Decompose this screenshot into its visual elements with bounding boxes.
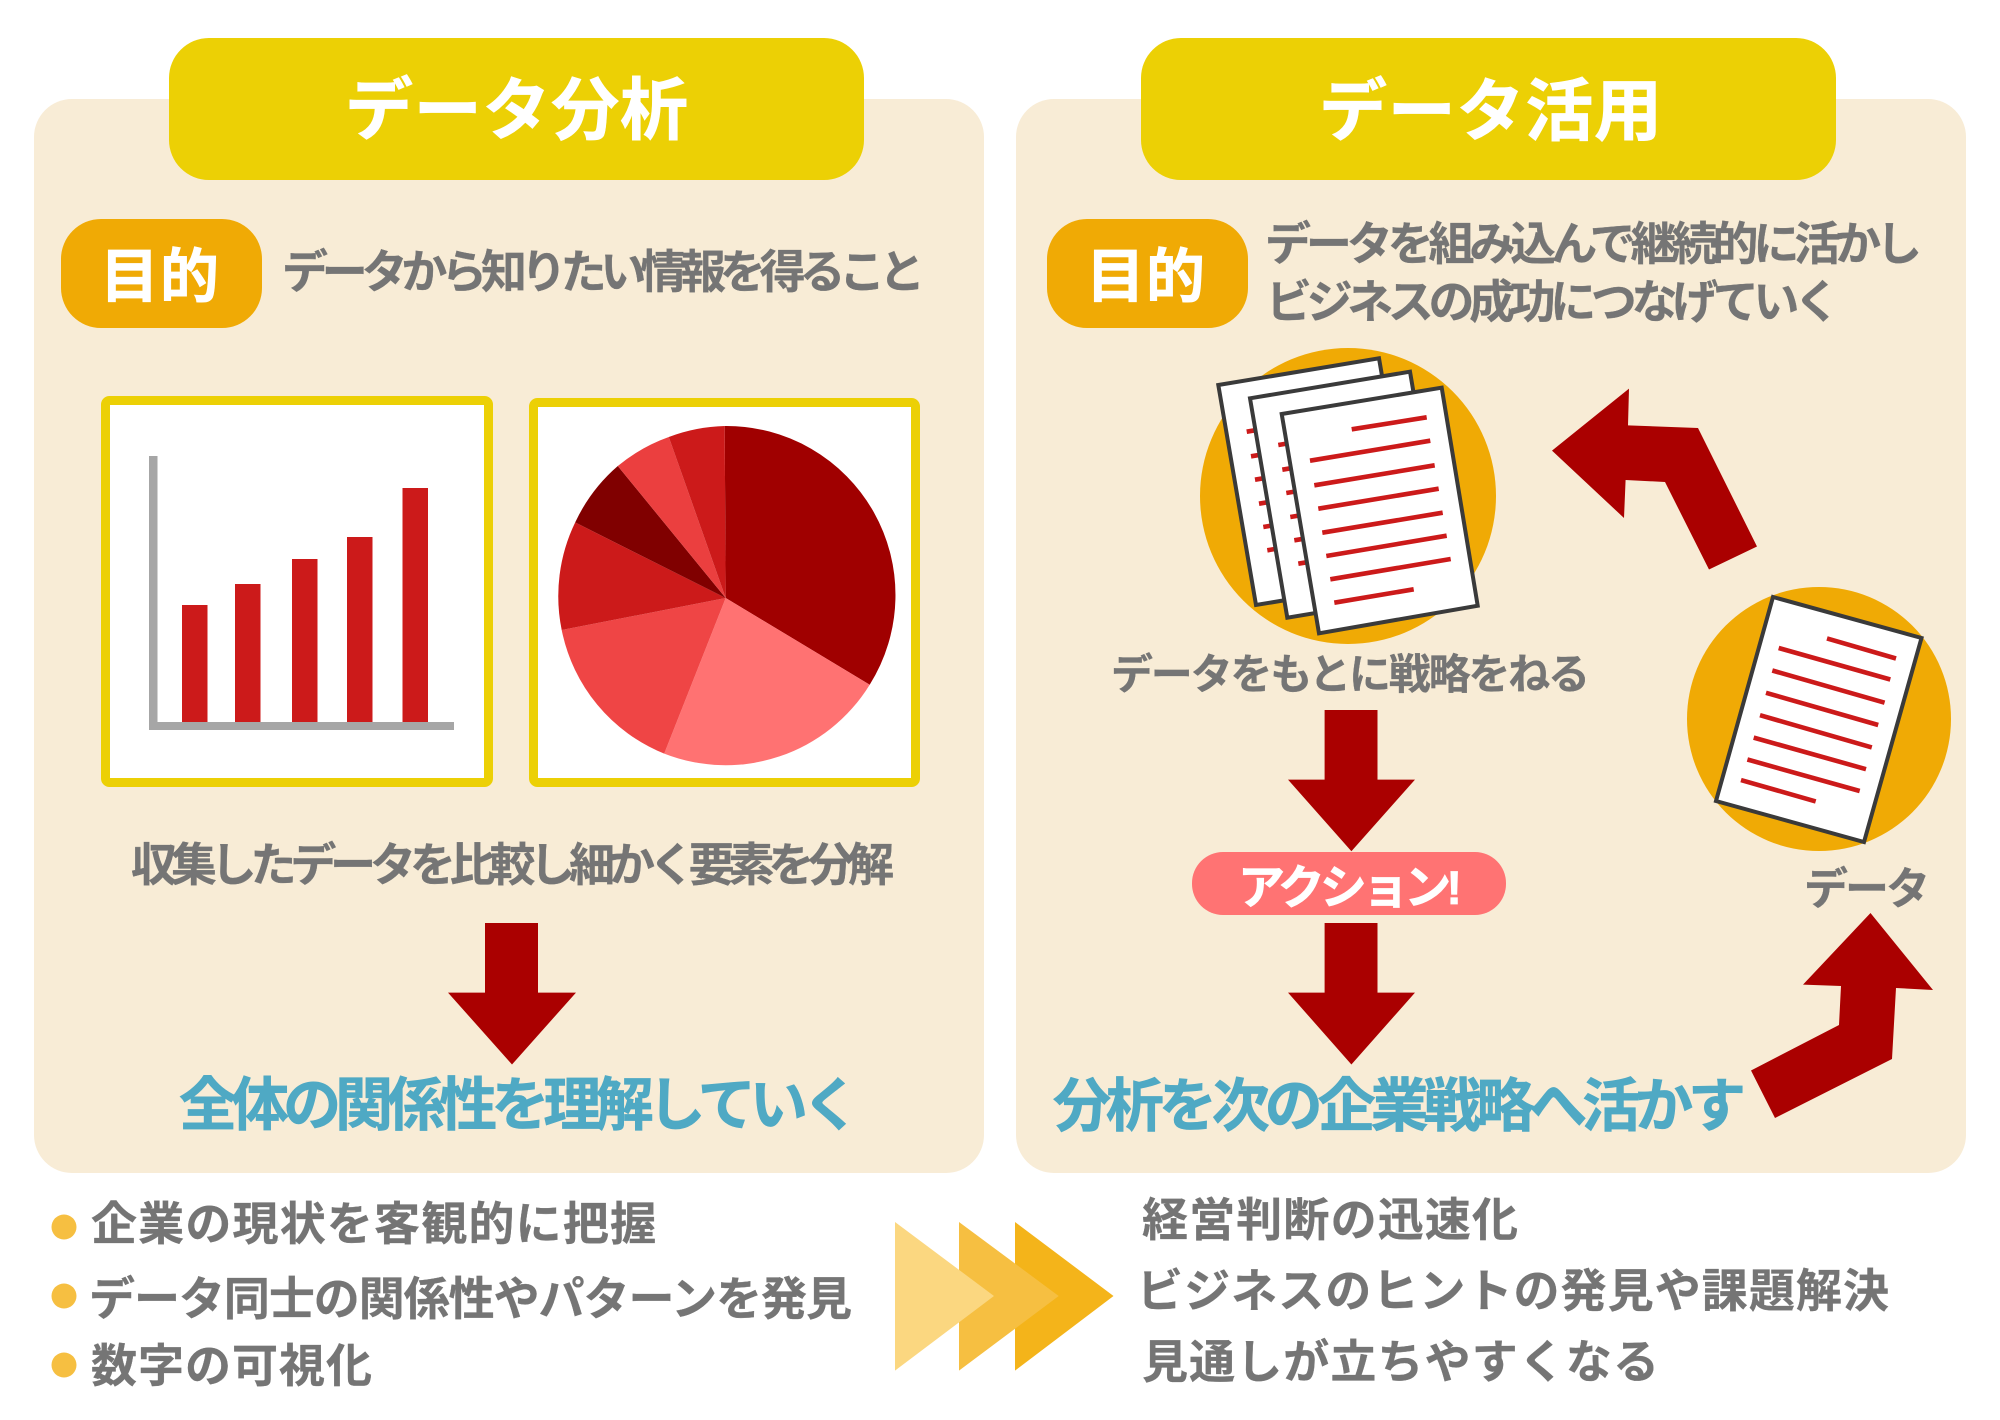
chevron arrows <box>895 1222 1114 1371</box>
purpose text: right: データを組み込んで継続的に活かし <box>1265 218 1922 270</box>
purpose badge: right: 目的 <box>1086 244 1205 310</box>
purpose text: left: データから知りたい情報を得ること <box>282 246 925 298</box>
list: utilisation benefits <box>1137 1194 1889 1388</box>
data label: データ <box>1804 865 1930 914</box>
purpose text: right: ビジネスの成功につなげていく <box>1266 276 1840 328</box>
heading: data analysis: データ分析 <box>345 73 688 149</box>
panel background: left <box>34 99 984 1173</box>
strategy label: データをもとに戦略をねる <box>1111 651 1590 698</box>
benefit 3: 見通しが立ちやすくなる <box>1142 1336 1659 1388</box>
conclusion: understand relationships: 全体の関係性を理解していく <box>179 1073 860 1138</box>
benefit 2: ビジネスのヒントの発見や課題解決 <box>1137 1265 1889 1317</box>
panel background: right <box>1016 99 1966 1173</box>
arrow: strategy to action <box>1288 710 1415 851</box>
arrow: action to conclusion <box>1288 923 1415 1064</box>
conclusion: apply to next strategy: 分析を次の企業戦略へ活かす <box>1053 1074 1746 1139</box>
heading: data analysis <box>169 38 864 180</box>
purpose text: right <box>1265 218 1922 328</box>
purpose badge: right <box>1047 219 1248 328</box>
action pill: アクション! <box>1238 861 1462 914</box>
action pill <box>1192 852 1506 915</box>
panel: data utilisation <box>1016 38 1966 1173</box>
arrow: down to conclusion <box>448 923 576 1064</box>
heading: data utilisation <box>1141 38 1836 180</box>
bullet item 1: 企業の現状を客観的に把握 <box>91 1198 656 1250</box>
bullet item 2: データ同士の関係性やパターンを発見 <box>89 1273 852 1325</box>
bar chart <box>106 400 488 782</box>
panel: data analysis <box>34 38 984 1173</box>
purpose badge: left <box>61 219 262 328</box>
list: analysis benefits <box>52 1198 852 1392</box>
bullet item 3: 数字の可視化 <box>91 1340 372 1392</box>
benefit 1: 経営判断の迅速化 <box>1142 1194 1518 1246</box>
purpose badge: left: 目的 <box>100 244 219 310</box>
pie chart <box>534 402 916 782</box>
analysis description: 収集したデータを比較し細かく要素を分解 <box>131 839 894 891</box>
icon: document stack on circle <box>1200 348 1496 644</box>
heading: data utilisation: データ活用 <box>1319 74 1662 150</box>
icon: single document on circle <box>1687 587 1951 851</box>
arrow: data to strategy (cycle) <box>1552 389 1757 570</box>
arrow: strategy feedback to data (cycle) <box>1751 913 1933 1118</box>
